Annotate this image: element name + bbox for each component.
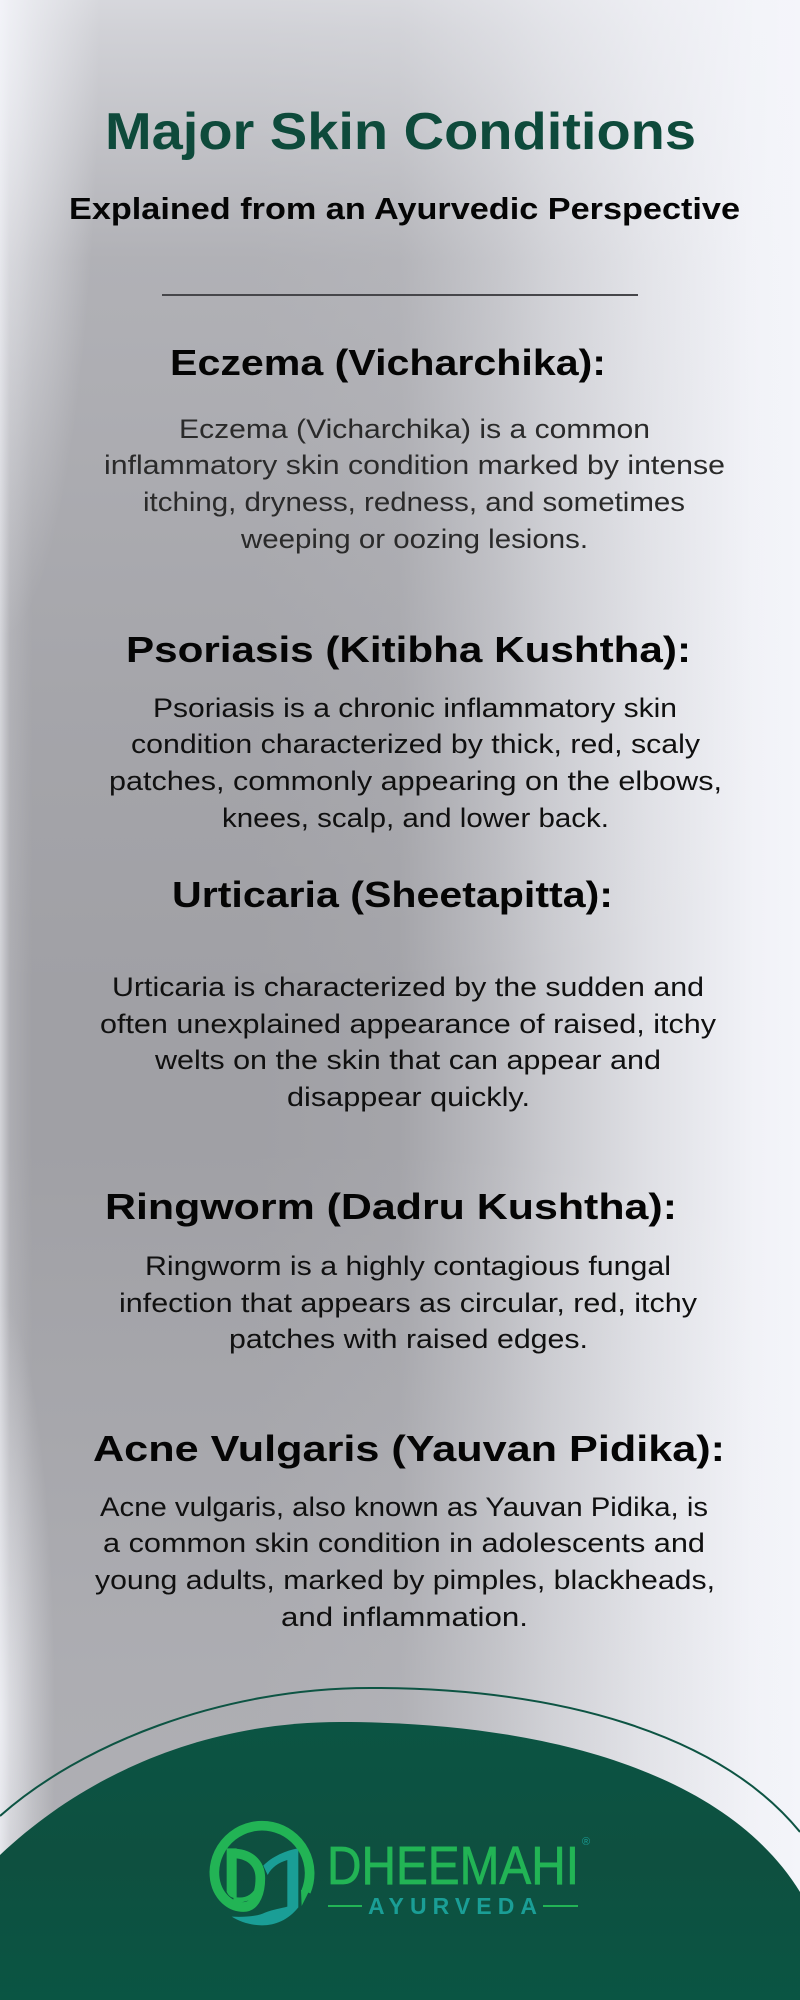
text block: acne description: Acne vulgaris, also known as Yauvan Pidika, is: [100, 1492, 708, 1522]
text block: urticaria description: [100, 972, 717, 1112]
text block: ringworm description: Ringworm is a highly contagious fungal: [145, 1251, 671, 1281]
heading: eczema: Eczema (Vicharchika):: [170, 342, 606, 383]
panel: ringworm: [105, 1186, 698, 1354]
text block: acne description: and inflammation.: [281, 1602, 528, 1632]
panel: urticaria: [100, 874, 717, 1112]
heading: urticaria: Urticaria (Sheetapitta):: [172, 874, 613, 915]
text block: urticaria description: disappear quickly.: [287, 1082, 530, 1112]
text block: urticaria description: often unexplained appearance of raised, itchy: [100, 1009, 717, 1039]
footer panel: [0, 1722, 800, 2000]
text block: eczema description: itching, dryness, redness, and sometimes: [143, 487, 685, 517]
text block: psoriasis description: [109, 693, 722, 833]
footer outline arc: [0, 1688, 800, 1832]
icon: dheemahi monogram: [214, 1826, 310, 1925]
title: Major Skin Conditions: [105, 103, 696, 161]
logo: [214, 1826, 590, 1925]
heading: ringworm: Ringworm (Dadru Kushtha):: [105, 1186, 677, 1227]
logo wordmark: DHEEMAHI: [327, 1836, 579, 1896]
registered mark: ®: [582, 1836, 590, 1848]
text block: psoriasis description: knees, scalp, and lower back.: [222, 803, 609, 833]
text block: psoriasis description: condition characterized by thick, red, scaly: [131, 729, 701, 759]
subtitle: Explained from an Ayurvedic Perspective: [69, 192, 740, 226]
text block: ringworm description: patches with raised edges.: [229, 1324, 588, 1354]
text block: psoriasis description: Psoriasis is a chronic inflammatory skin: [153, 693, 677, 723]
text block: acne description: young adults, marked by pimples, blackheads,: [95, 1565, 715, 1595]
text block: urticaria description: Urticaria is characterized by the sudden and: [112, 972, 704, 1002]
text block: acne description: [95, 1492, 715, 1632]
text block: eczema description: [104, 414, 725, 554]
heading: psoriasis: Psoriasis (Kitibha Kushtha):: [126, 629, 691, 670]
text block: urticaria description: welts on the skin that can appear and: [154, 1045, 661, 1075]
panel: eczema: [104, 342, 725, 554]
panel: acne vulgaris: [93, 1428, 725, 1632]
text block: eczema description: Eczema (Vicharchika) is a common: [179, 414, 650, 444]
heading: acne vulgaris: Acne Vulgaris (Yauvan Pidika):: [93, 1428, 725, 1469]
logo tagline: AYURVEDA: [368, 1893, 537, 1919]
text block: psoriasis description: patches, commonly appearing on the elbows,: [109, 766, 722, 796]
text block: acne description: a common skin condition in adolescents and: [103, 1528, 705, 1558]
text block: ringworm description: [119, 1251, 698, 1354]
text block: eczema description: weeping or oozing lesions.: [240, 524, 588, 554]
panel: psoriasis: [109, 629, 722, 833]
text block: ringworm description: infection that appears as circular, red, itchy: [119, 1288, 698, 1318]
text block: eczema description: inflammatory skin condition marked by intense: [104, 450, 725, 480]
